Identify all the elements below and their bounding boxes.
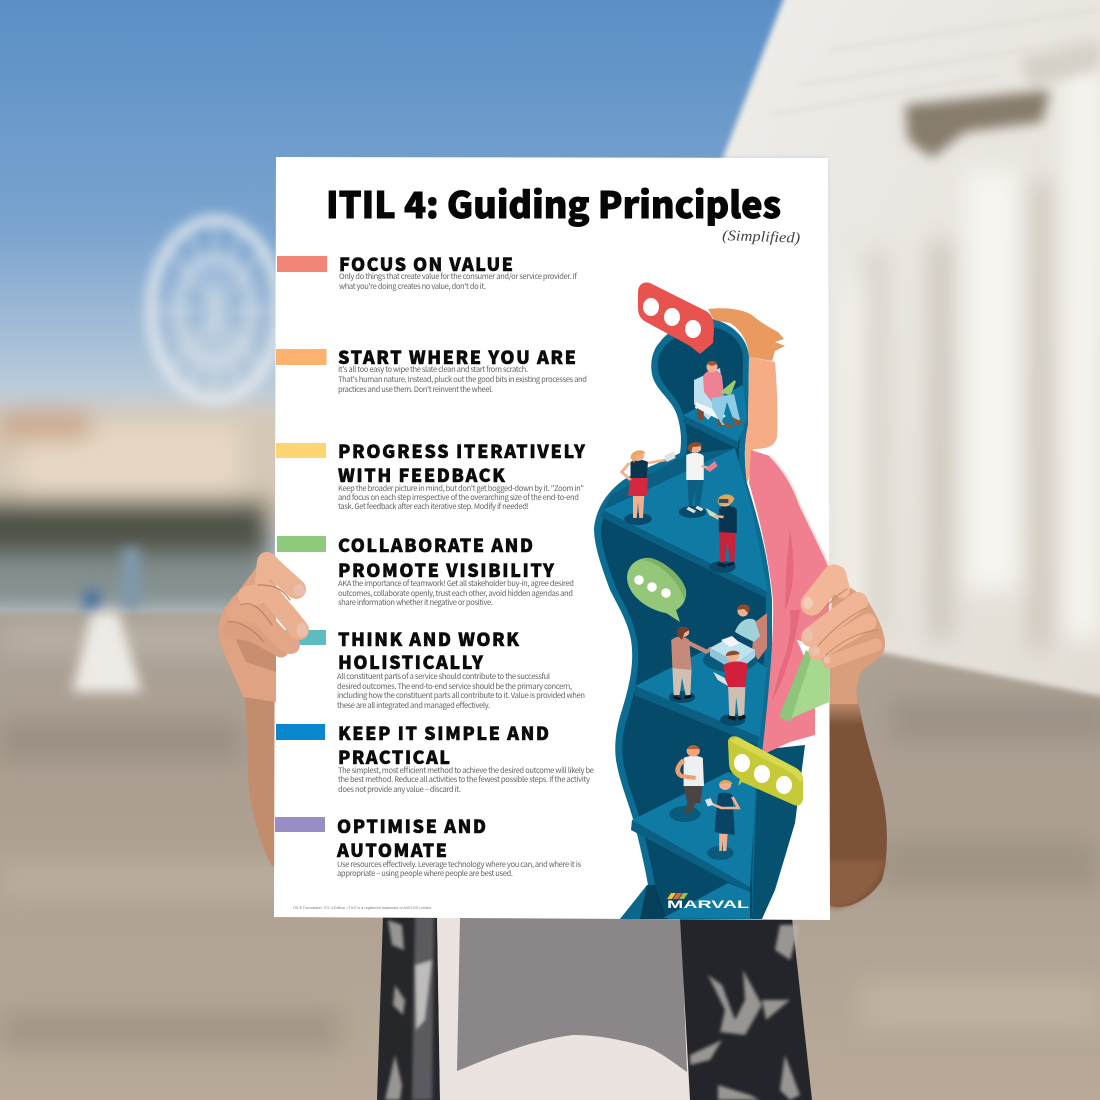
principle: keep it simple: does not provide any value – discard it. bbox=[338, 784, 461, 795]
principle: collaborate: outcomes, collaborate openly, trust each other, avoid hidden agendas and bbox=[338, 588, 573, 599]
principle: keep it simple: PRACTICAL bbox=[338, 744, 450, 770]
principle: optimise and automate: OPTIMISE AND bbox=[337, 813, 486, 839]
principle: start where you are bbox=[276, 344, 587, 395]
principle: start where you are: That's human nature. Instead, pluck out the good bits in existing processes and bbox=[338, 374, 587, 385]
principle: collaborate: COLLABORATE AND bbox=[338, 532, 533, 558]
principle: optimise and automate: AUTOMATE bbox=[336, 837, 447, 863]
arms behind the poster bbox=[243, 685, 887, 908]
shirt bbox=[749, 450, 829, 755]
principle: collaborate: share information whether it negative or positive. bbox=[338, 597, 493, 608]
poster board bbox=[274, 157, 830, 920]
person: woman in red trousers bbox=[706, 494, 737, 573]
floor: bottom level bbox=[663, 883, 750, 918]
red speech bubble bbox=[638, 282, 714, 354]
principle: think holistically: these are all integrated and managed effectively. bbox=[337, 700, 490, 711]
right hand bbox=[803, 574, 885, 704]
principle: optimise and automate bbox=[275, 813, 581, 879]
principle: start where you are: It's all too easy to wipe the slate clean and start from scratch. bbox=[338, 364, 528, 375]
principle: progress iteratively: Keep the broader picture in mind, but don't get bogged-down by it. "Zoom in" bbox=[338, 483, 584, 494]
floor: shoulder level bbox=[601, 448, 768, 598]
silhouette interior bbox=[601, 327, 766, 918]
back column bbox=[752, 745, 805, 919]
principle: think holistically: including how the constituent parts all contribute to it. Value is provided when bbox=[337, 690, 585, 701]
principle: focus on value bbox=[277, 251, 578, 292]
floor: desk level bbox=[634, 640, 767, 745]
principle: progress iteratively: PROGRESS ITERATIVELY bbox=[338, 438, 586, 464]
principle: think holistically: desired outcomes. The end-to-end service should be the primary concern, bbox=[337, 681, 572, 692]
green bag bbox=[779, 640, 829, 722]
left hand bbox=[218, 562, 308, 702]
principle: keep it simple: the best method. Reduce all activities to the fewest possible steps. If the activity bbox=[338, 774, 590, 785]
person: shirt and jacket below the poster bbox=[377, 916, 812, 1100]
lime speech bubble bbox=[728, 736, 803, 806]
white building bbox=[722, 0, 1100, 698]
person: man in white tank top bbox=[669, 746, 704, 822]
logo: Marval bbox=[667, 893, 749, 911]
principle: collaborate bbox=[277, 532, 574, 608]
principle: optimise and automate: appropriate – using people where people are best used. bbox=[337, 868, 513, 879]
person and desk: man at laptop bbox=[703, 604, 767, 672]
principle: think holistically bbox=[277, 626, 585, 711]
principle: keep it simple: KEEP IT SIMPLE AND bbox=[338, 720, 549, 746]
illustration: head and body silhouette bbox=[594, 319, 805, 919]
principle: focus on value: FOCUS ON VALUE bbox=[339, 251, 513, 277]
principle: focus on value: Only do things that create value for the consumer and/or service provider. If bbox=[339, 271, 578, 282]
principle: keep it simple bbox=[276, 720, 594, 795]
neck and face bbox=[745, 357, 777, 484]
title: ITIL 4: Guiding Principles bbox=[326, 177, 781, 229]
principle: collaborate: PROMOTE VISIBILITY bbox=[338, 557, 555, 583]
silhouette rim bbox=[594, 319, 772, 919]
person: woman in white top bbox=[679, 442, 718, 518]
person: woman in red skirt bbox=[622, 450, 676, 525]
principle: think holistically: HOLISTICALLY bbox=[338, 649, 484, 675]
principle: keep it simple: The simplest, most efficient method to achieve the desired outcome will likely be bbox=[338, 765, 594, 776]
floor: head level bbox=[683, 385, 747, 449]
person: woman in navy dress bbox=[705, 780, 738, 860]
principle: progress iteratively: and focus on each step irrespective of the overarching size of the end-to-end bbox=[338, 492, 579, 503]
subtitle: (Simplified) bbox=[722, 228, 800, 247]
footnote: ITIL® Foundation: ITIL 4 Edition. ITIL® is a registered trademark of AXELOS Limited. bbox=[293, 906, 432, 910]
person: man in brown shirt bbox=[669, 627, 712, 703]
green speech bubble bbox=[627, 558, 686, 622]
principle: focus on value: what you're doing creates no value, don't do it. bbox=[339, 281, 486, 292]
principle: optimise and automate: Use resources effectively. Leverage technology where you can, and where it is bbox=[337, 859, 581, 870]
roof slats bbox=[770, 10, 1100, 115]
principle: think holistically: All constituent parts of a service should contribute to the successful bbox=[337, 671, 550, 682]
principle: collaborate: AKA the importance of teamwork! Get all stakeholder buy-in, agree desired bbox=[338, 578, 574, 589]
hair bbox=[708, 308, 785, 361]
crane print bbox=[385, 920, 800, 1100]
principle: progress iteratively: WITH FEEDBACK bbox=[338, 462, 505, 488]
illustration: face, hair and shirt bbox=[638, 282, 829, 806]
principle: progress iteratively: task. Get feedback after each iterative step. Modify if needed! bbox=[338, 501, 529, 512]
blurred bollard bbox=[72, 548, 142, 692]
promenade ground bbox=[0, 612, 1100, 1100]
principle: start where you are: practices and use them. Don't reinvent the wheel. bbox=[338, 384, 493, 395]
person: man in red jumper bbox=[713, 650, 748, 726]
floor: lower level bbox=[631, 772, 756, 893]
principle: think holistically: THINK AND WORK bbox=[338, 626, 519, 652]
logo: Marval: MARVAL bbox=[667, 899, 749, 911]
person: seated man reading bbox=[694, 361, 742, 427]
principle: start where you are: START WHERE YOU ARE bbox=[338, 344, 576, 370]
principle: progress iteratively bbox=[276, 438, 586, 512]
ferris wheel bbox=[150, 220, 282, 400]
